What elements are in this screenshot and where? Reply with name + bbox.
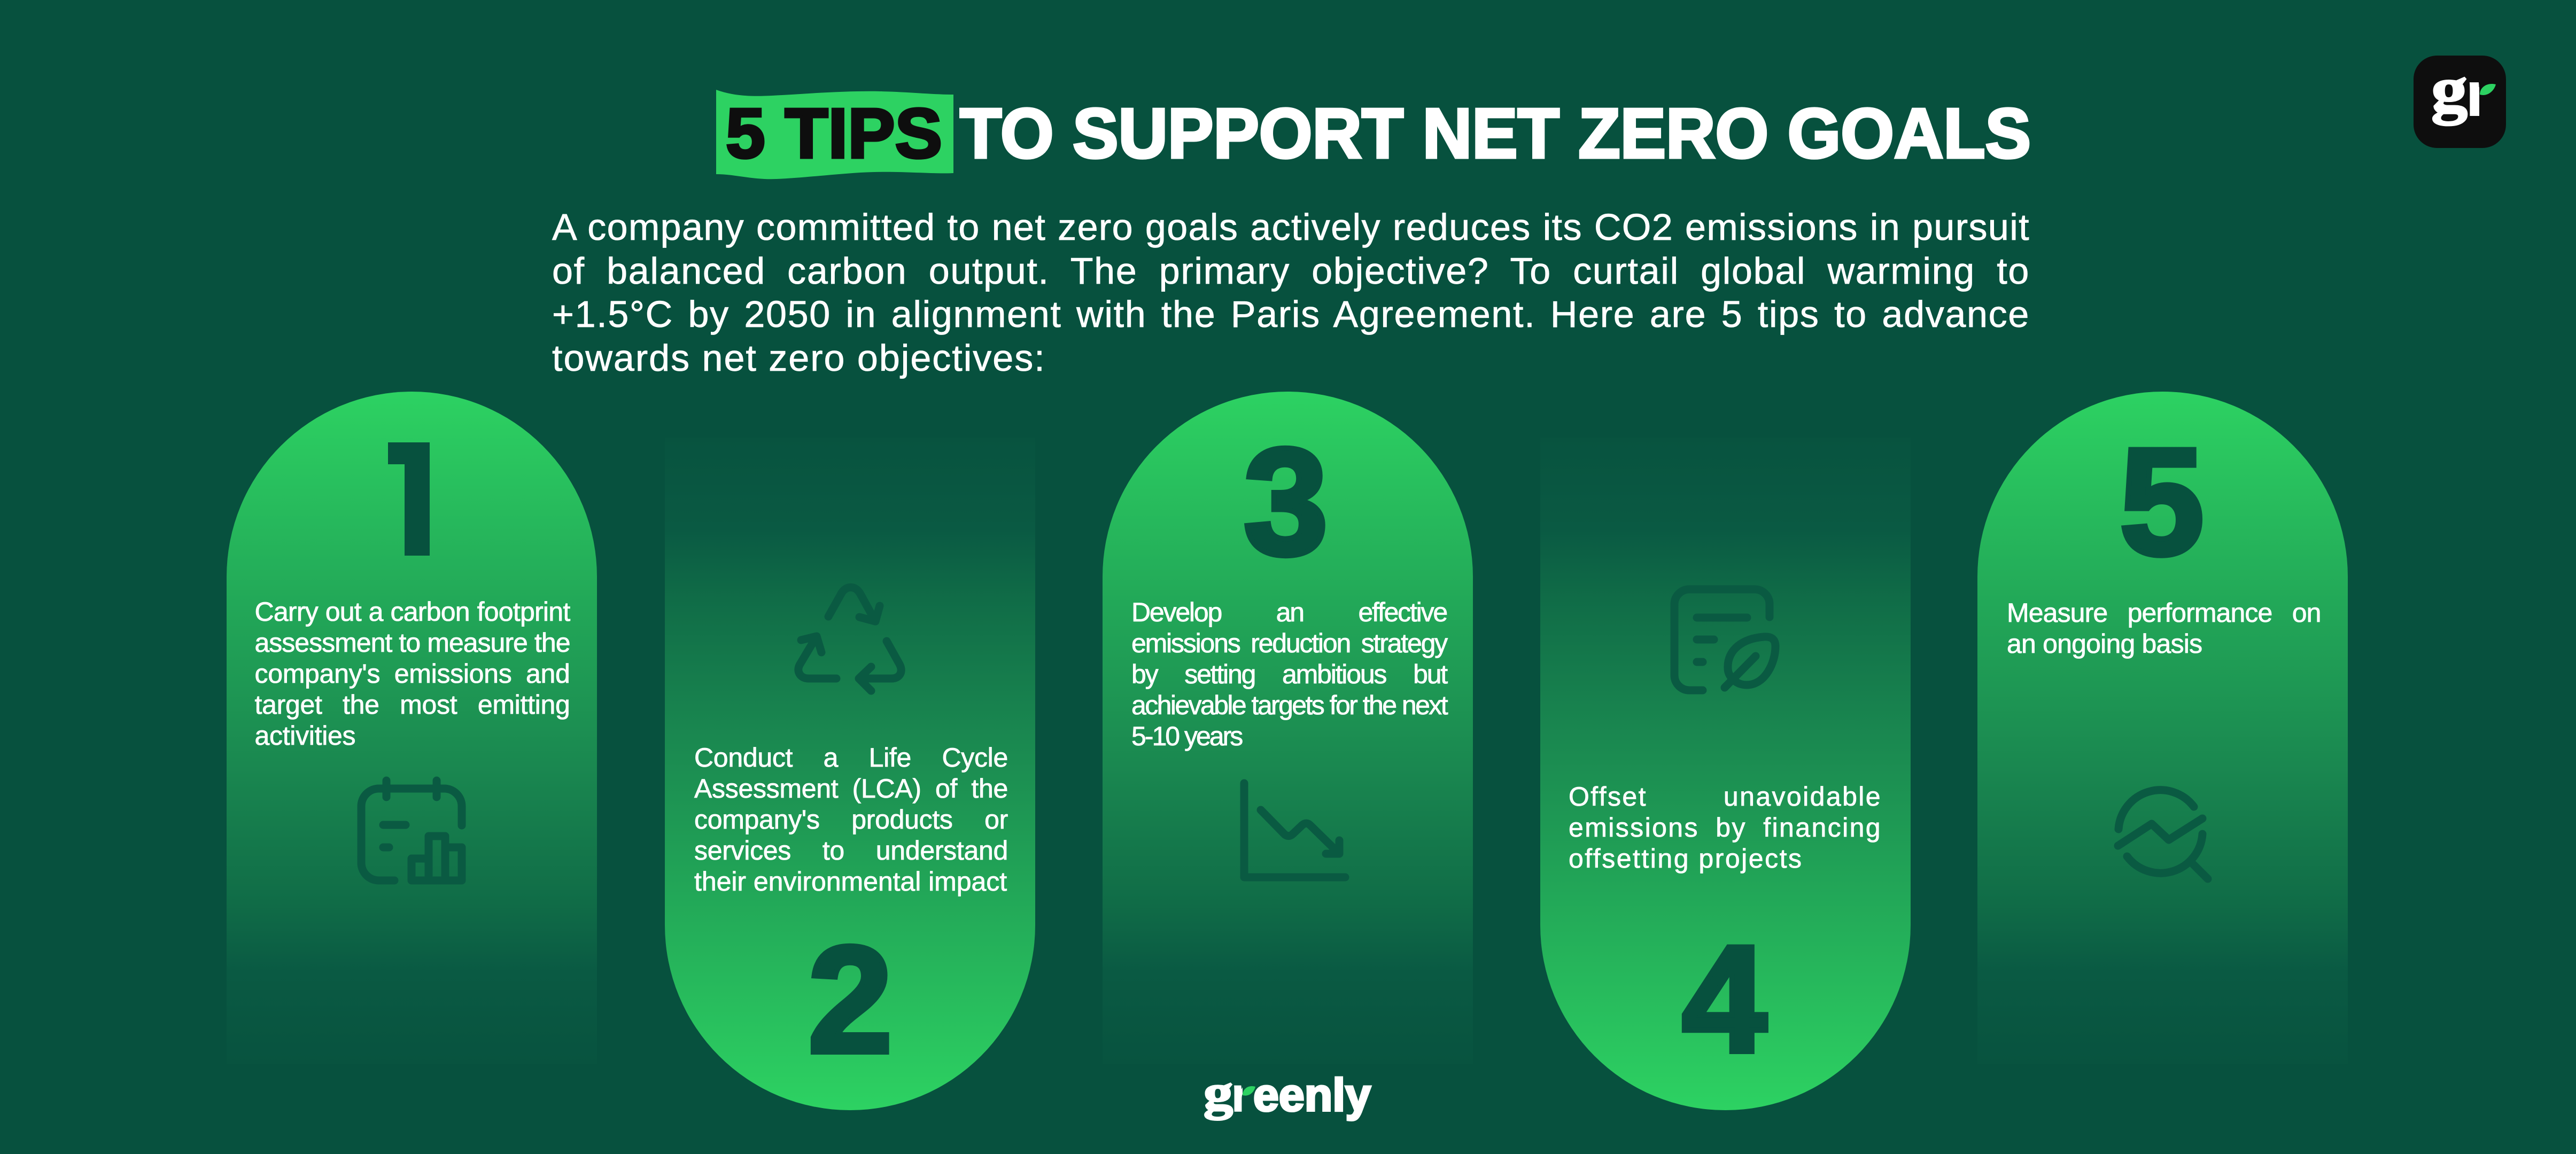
icon: calendar with bars bbox=[361, 781, 462, 880]
text: tip 1: company's emissions and bbox=[254, 659, 570, 689]
number 1: 1 bbox=[373, 417, 457, 586]
logo tile bbox=[2414, 53, 2506, 148]
title bbox=[716, 90, 2031, 179]
icon: declining chart bbox=[1244, 783, 1345, 877]
text: tip 1 bbox=[254, 597, 571, 751]
text: tip 3: 5-10 years bbox=[1131, 721, 1242, 751]
text: tip 4 bbox=[1569, 782, 1882, 874]
text: tip 4: offsetting projects bbox=[1569, 844, 1803, 874]
number 1 bbox=[388, 442, 430, 556]
text: tip 5: Measure performance on bbox=[2007, 598, 2321, 628]
text: tip 4: Offset unavoidable bbox=[1569, 782, 1882, 812]
panel: tip 1 bbox=[227, 392, 597, 984]
text: tip 1: Carry out a carbon footprint bbox=[254, 597, 570, 627]
footer logo: greenly: eenly bbox=[1253, 1070, 1371, 1121]
intro paragraph bbox=[552, 206, 2030, 379]
intro paragraph: of balanced carbon output. The primary objective? To curtail global warming to bbox=[552, 250, 2030, 292]
footer logo: greenly: r bbox=[1231, 1069, 1250, 1122]
icon: recycle arrows bbox=[798, 587, 901, 691]
intro paragraph: +1.5°C by 2050 in alignment with the Paris Agreement. Here are 5 tips to advance bbox=[552, 293, 2030, 335]
text: tip 2: their environmental impact bbox=[694, 867, 1007, 896]
text: tip 3: by setting ambitious but bbox=[1131, 659, 1447, 689]
text: tip 2: services to understand bbox=[694, 836, 1008, 865]
text: tip 1: assessment to measure the bbox=[254, 628, 570, 658]
panel: tip 4 bbox=[1540, 438, 1911, 1110]
text: tip 2 bbox=[694, 743, 1008, 896]
intro paragraph: A company committed to net zero goals actively reduces its CO2 emissions in pursuit bbox=[552, 206, 2030, 248]
text: tip 2: company's products or bbox=[694, 805, 1008, 835]
text: tip 1: activities bbox=[254, 721, 355, 751]
text: tip 5 bbox=[2007, 598, 2321, 659]
text: tip 3: emissions reduction strategy bbox=[1131, 628, 1447, 658]
panel: tip 2 bbox=[665, 438, 1035, 1110]
panel: tip 5 bbox=[1977, 392, 2348, 1064]
text: tip 3 bbox=[1131, 597, 1448, 751]
title: 5 tips: 5 TIPS bbox=[726, 94, 942, 173]
text: tip 4: emissions by financing bbox=[1569, 813, 1882, 843]
text: tip 2: Assessment (LCA) of the bbox=[694, 774, 1008, 804]
text: tip 3: achievable targets for the next bbox=[1131, 690, 1447, 720]
logo tile: g bbox=[2431, 53, 2468, 126]
text: tip 1: target the most emitting bbox=[254, 690, 570, 720]
title: to support net zero goals: TO SUPPORT NET ZERO GOALS bbox=[960, 94, 2031, 173]
number 4: 4 bbox=[1682, 915, 1767, 1084]
text: tip 2: Conduct a Life Cycle bbox=[694, 743, 1008, 773]
icon: document with leaf bbox=[1674, 589, 1775, 690]
intro paragraph: towards net zero objectives: bbox=[552, 337, 1046, 379]
footer logo: greenly bbox=[1204, 1076, 1372, 1121]
number 3: 3 bbox=[1244, 417, 1328, 587]
number 5: 5 bbox=[2120, 417, 2204, 587]
text: tip 3: Develop an effective bbox=[1131, 597, 1447, 627]
title highlight bbox=[716, 90, 953, 179]
panel: tip 3 bbox=[1103, 392, 1473, 1064]
logo tile: r bbox=[2466, 60, 2490, 129]
text: tip 5: an ongoing basis bbox=[2007, 629, 2202, 659]
icon: magnifier with trend line bbox=[2118, 790, 2208, 879]
footer logo: greenly: g bbox=[1204, 1065, 1233, 1120]
number 2: 2 bbox=[808, 915, 893, 1085]
